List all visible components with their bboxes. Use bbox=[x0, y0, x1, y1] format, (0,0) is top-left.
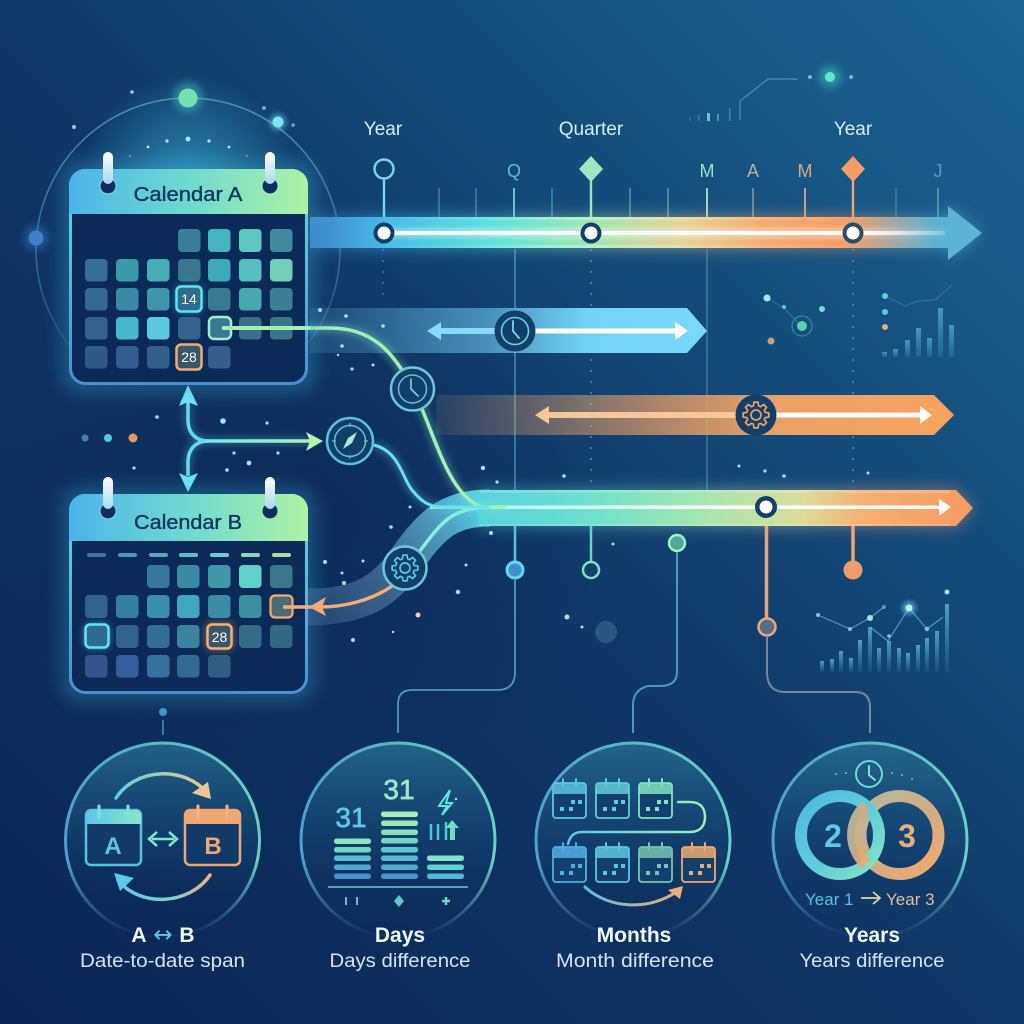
timeline ticks and letters: M bbox=[798, 161, 812, 181]
calendar A and B connector arrows bbox=[179, 385, 323, 492]
calendar A header: Calendar A bbox=[134, 184, 243, 206]
orange target cell with arrow bbox=[270, 586, 392, 618]
timeline header labels: Quarter bbox=[559, 119, 624, 140]
panel: month difference bbox=[536, 743, 730, 972]
caption: Month difference bbox=[556, 951, 714, 972]
connector: months column bbox=[633, 535, 685, 733]
green path from calendar A bbox=[222, 328, 505, 507]
mini chart: lower right bbox=[816, 590, 950, 672]
calendar B weekday dashes bbox=[87, 553, 291, 557]
icon: cycle arrows bbox=[114, 774, 211, 899]
main timeline arrow bbox=[310, 206, 982, 260]
tube from calendar B up to merged bar bbox=[308, 508, 490, 607]
year range label: Year 3 bbox=[886, 890, 935, 909]
icon: clock bbox=[836, 761, 912, 787]
connector: A to B column bbox=[159, 708, 167, 735]
numbers bbox=[335, 774, 415, 833]
axis and ticks bbox=[328, 887, 468, 907]
decoration: orbit around calendar A bbox=[23, 70, 340, 402]
circle frame bbox=[301, 743, 495, 937]
mini network and chart: upper right bbox=[764, 285, 954, 357]
icon: double arrow bbox=[149, 832, 177, 846]
panel: calendar B bbox=[60, 477, 392, 703]
timeline header labels: Year bbox=[834, 119, 873, 140]
calendar B header bbox=[69, 477, 308, 541]
caption bbox=[556, 924, 714, 972]
caption bbox=[330, 924, 470, 972]
scattered particles bbox=[132, 308, 869, 642]
timeline marker: Quarter bbox=[579, 156, 603, 244]
icon: gear node bbox=[384, 546, 426, 590]
bar stacks bbox=[334, 812, 464, 879]
timeline ticks and letters: M bbox=[700, 161, 714, 181]
curved arrow bbox=[585, 886, 683, 905]
caption: B bbox=[179, 924, 195, 947]
connector: quarter node bbox=[583, 526, 599, 578]
timeline ticks and letters: A bbox=[747, 161, 759, 181]
panel: days difference bbox=[301, 743, 495, 972]
panel: years difference bbox=[773, 743, 967, 972]
caption: Days difference bbox=[330, 951, 470, 972]
numbers: 31 bbox=[335, 802, 367, 833]
calendar B day grid bbox=[85, 565, 292, 678]
date cell 28 bbox=[206, 623, 233, 650]
calendar A header bbox=[69, 152, 308, 214]
icon: bolt and arrows bbox=[431, 790, 459, 840]
date cell 14: 14 bbox=[181, 291, 197, 307]
band: merged gradient bar bbox=[430, 490, 973, 526]
caption: ↔ bbox=[153, 922, 173, 948]
icon: linked rings: 2 bbox=[824, 818, 842, 854]
icon: linked rings bbox=[801, 796, 938, 874]
timeline header labels bbox=[364, 119, 873, 140]
year range label: Year 1 bbox=[805, 890, 854, 909]
icon: compass node bbox=[327, 418, 373, 464]
icon: linked rings: 3 bbox=[898, 818, 916, 854]
icon: calendar B: B bbox=[204, 833, 222, 860]
timeline marker: Year start bbox=[374, 160, 394, 244]
panel: calendar A bbox=[60, 152, 317, 394]
numbers: 31 bbox=[383, 774, 415, 805]
date cell 28: 28 bbox=[212, 629, 227, 645]
circle frame bbox=[536, 743, 730, 937]
icon: calendar A bbox=[86, 806, 141, 865]
status dots bbox=[82, 434, 138, 442]
year range label bbox=[805, 890, 935, 909]
selected start cell bbox=[85, 624, 109, 648]
serpentine path bbox=[568, 802, 705, 844]
connector: years column bbox=[758, 526, 870, 733]
timeline ticks and letters: J bbox=[934, 161, 942, 181]
selected cell with green link bbox=[209, 317, 310, 339]
date cell 14 bbox=[176, 286, 202, 312]
timeline header labels: Year bbox=[364, 119, 403, 140]
icon: calendar B bbox=[185, 806, 240, 865]
circle frame bbox=[773, 743, 967, 937]
caption: Days bbox=[375, 924, 425, 947]
band: blue range bar bbox=[310, 308, 707, 353]
caption: Date-to-date span bbox=[80, 951, 245, 972]
icon: gear on orange bar bbox=[736, 394, 776, 436]
icon: clock node bbox=[391, 368, 434, 410]
caption bbox=[80, 922, 245, 972]
calendar A day grid bbox=[85, 229, 292, 368]
caption: Years bbox=[844, 924, 900, 947]
timeline marker: Year end bbox=[841, 156, 865, 244]
connector: orange node bbox=[844, 526, 862, 580]
band: orange range bar bbox=[436, 394, 954, 436]
caption: A bbox=[131, 924, 147, 947]
panel: A to B date-to-date span bbox=[66, 743, 260, 972]
caption bbox=[800, 924, 944, 972]
calendar B header: Calendar B bbox=[134, 512, 242, 534]
dark orb bbox=[595, 621, 617, 643]
connector: days column bbox=[398, 526, 523, 733]
blue path from compass bbox=[374, 445, 490, 507]
date cell 28: 28 bbox=[181, 349, 197, 365]
icon: first row calendars bbox=[553, 779, 672, 818]
icon: clock on blue bar bbox=[494, 310, 536, 352]
timeline ticks and letters bbox=[439, 161, 942, 217]
icon: second row calendars bbox=[553, 843, 715, 882]
caption: Months bbox=[597, 924, 671, 947]
icon: calendar A: A bbox=[104, 833, 122, 860]
vertical guide lines bbox=[383, 249, 853, 490]
timeline ticks and letters: Q bbox=[507, 161, 521, 181]
date cell 28 bbox=[176, 344, 202, 370]
circle frame bbox=[66, 743, 260, 937]
caption: Years difference bbox=[800, 951, 944, 972]
decoration: top right signal bbox=[689, 66, 853, 121]
